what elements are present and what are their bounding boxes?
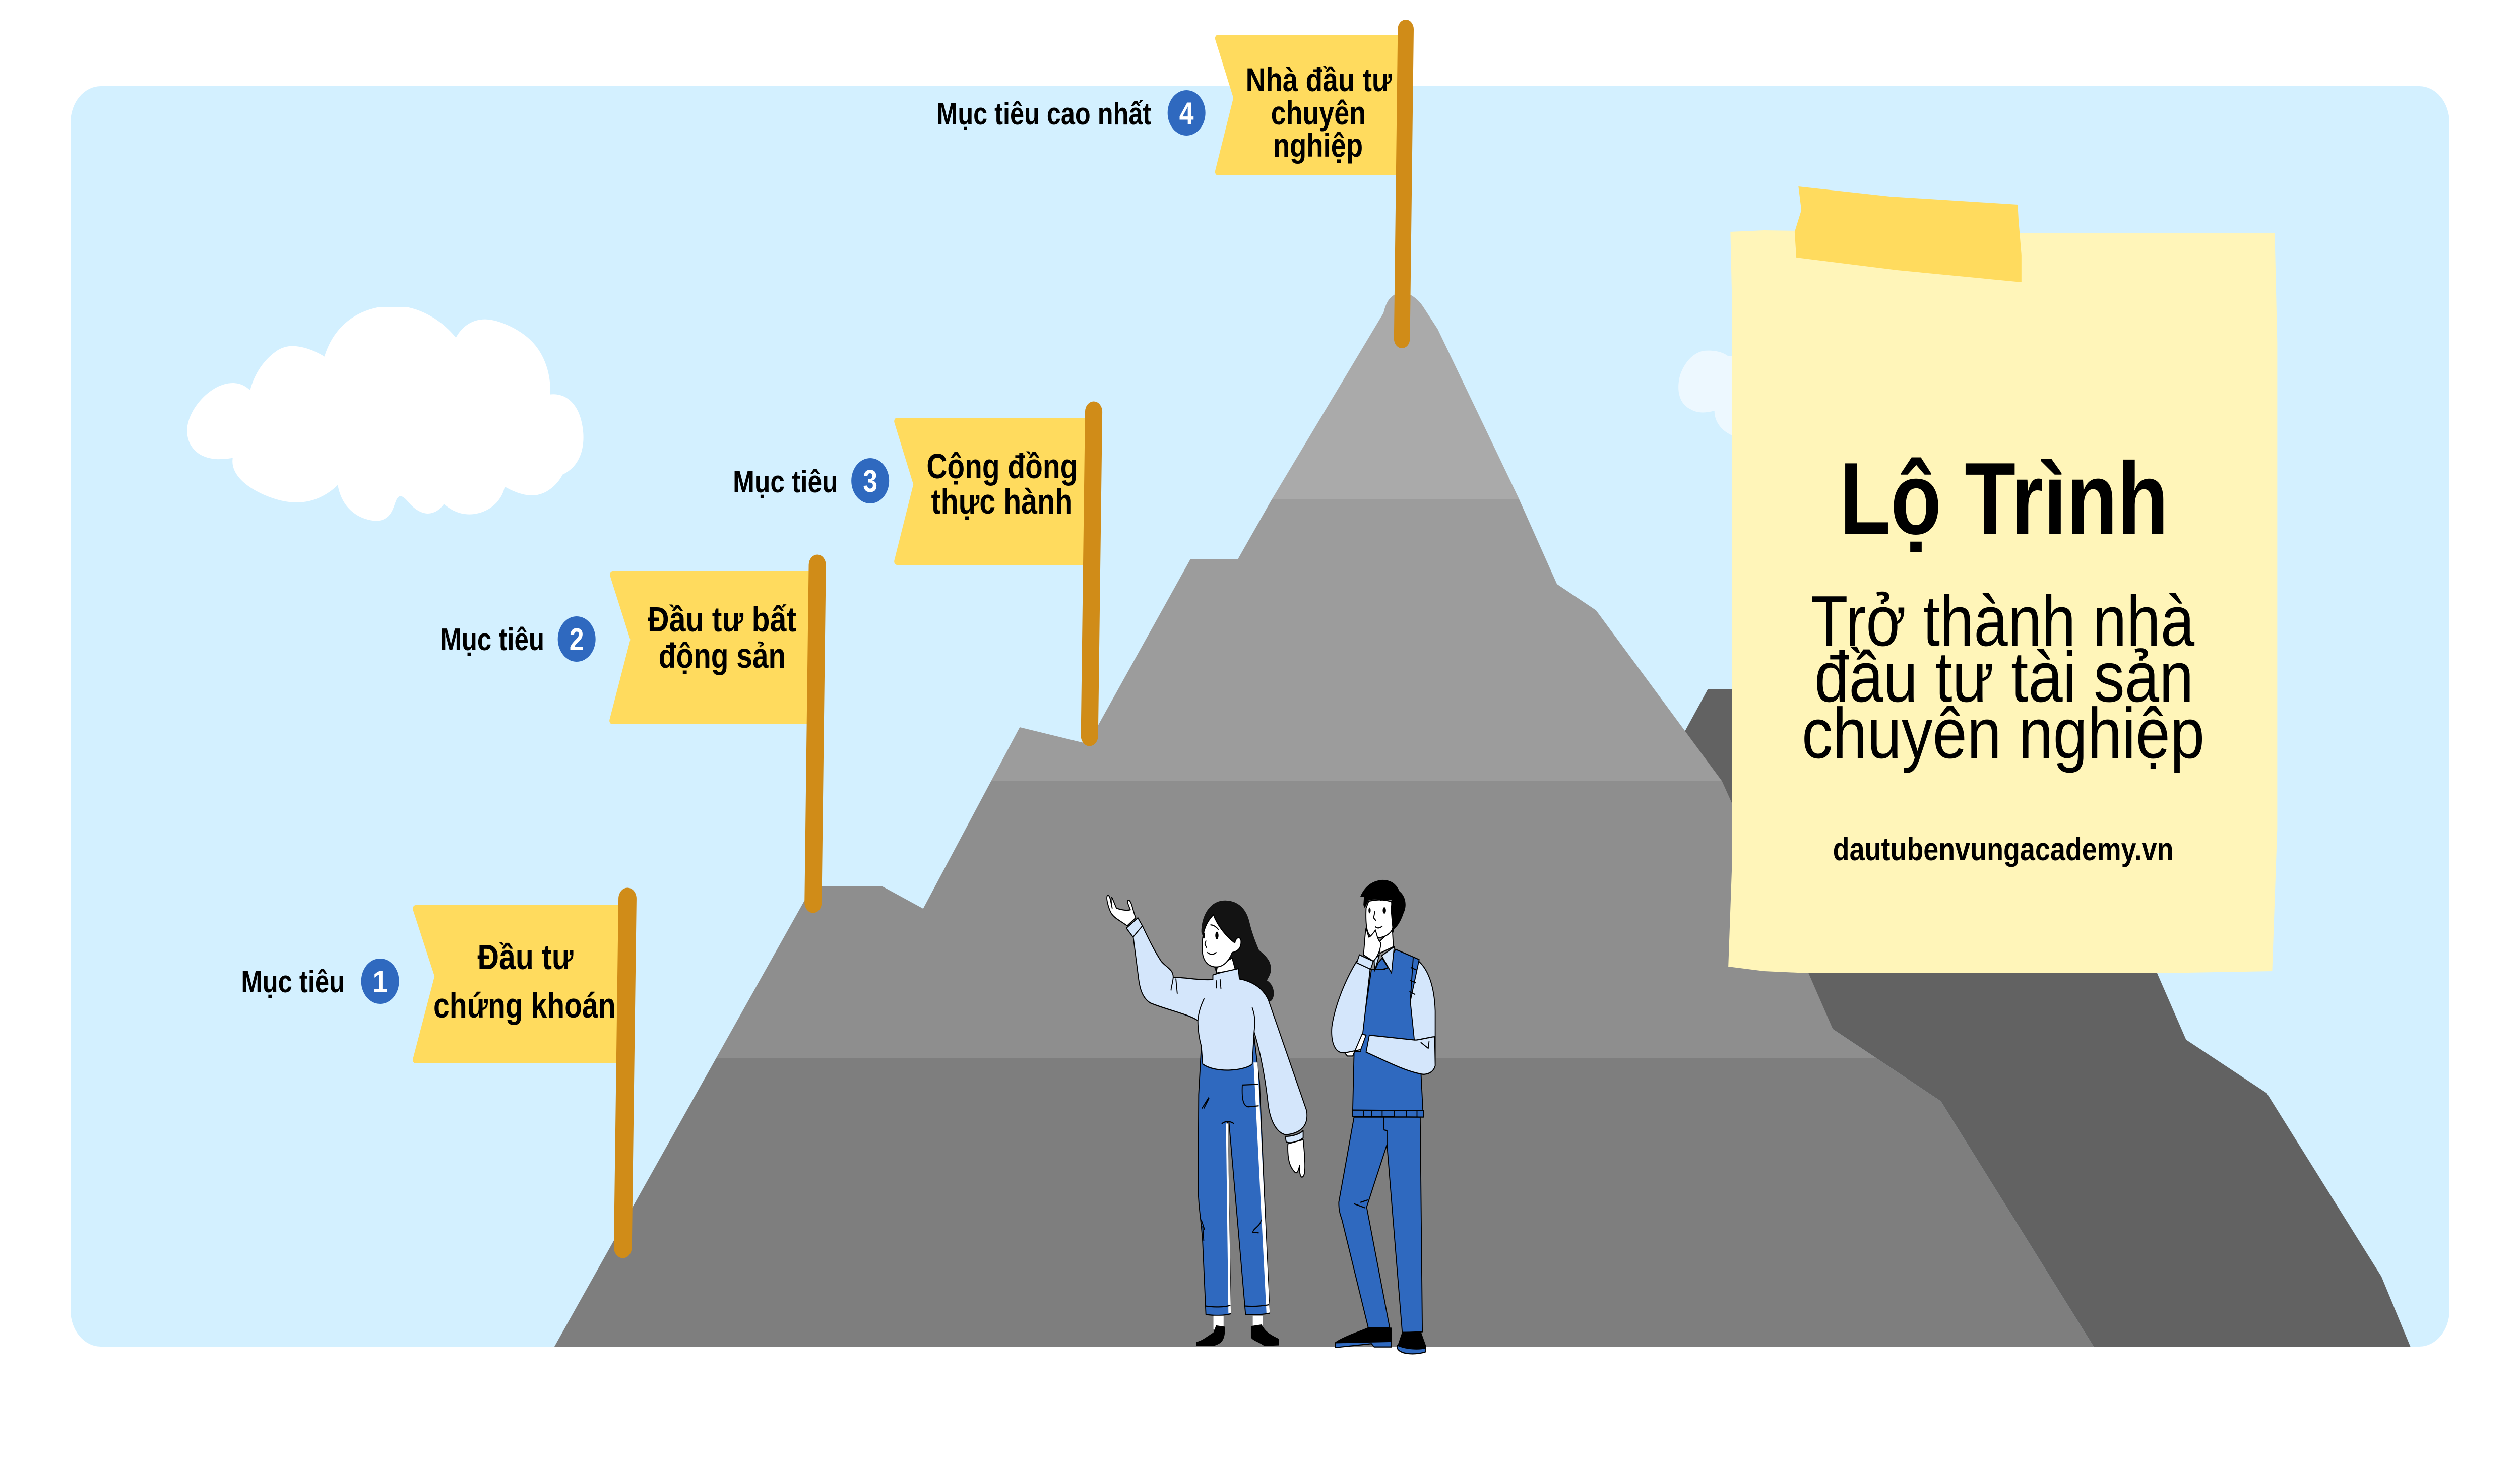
label: Mục tiêu 1: Mục tiêu [241, 965, 345, 999]
mountain: layered front peak [546, 287, 2100, 1347]
label: Mục tiêu 2: 2 [570, 622, 584, 657]
label: Mục tiêu cao nhất 4 [936, 90, 1206, 136]
flag 1: Đầu tư chứng khoán: Đầu tư [478, 937, 574, 977]
label: Mục tiêu cao nhất 4: 4 [1179, 96, 1194, 131]
label: Mục tiêu 1 [241, 959, 399, 1004]
label: Mục tiêu 2 [440, 616, 596, 662]
flag 3: Cộng đồng thực hành [897, 412, 1094, 736]
flag 1: Đầu tư chứng khoán [416, 899, 627, 1247]
flag 2: Đầu tư bất động sản [612, 565, 817, 903]
flag 2: Đầu tư bất động sản: Đầu tư bất [648, 600, 796, 639]
illustration: man thinking [1332, 880, 1435, 1354]
mountain: dark back ridge [1684, 689, 2410, 1347]
illustration: woman pointing up [1107, 895, 1307, 1346]
sticky note [1728, 186, 2277, 973]
flag 4: Nhà đầu tư chuyên nghiệp: nghiệp [1273, 126, 1363, 164]
subtitle: đầu tư tài sản [1814, 637, 2194, 717]
title: Lộ Trình [1840, 441, 2169, 555]
label: Mục tiêu 1: 1 [373, 965, 388, 999]
label: Mục tiêu cao nhất 4: Mục tiêu cao nhất [936, 97, 1151, 132]
flag 3: Cộng đồng thực hành: Cộng đồng [926, 447, 1078, 486]
website: dautubenvungacademy.vn [1833, 832, 2174, 867]
subtitle: Trở thành nhà [1810, 581, 2194, 661]
flag 1: Đầu tư chứng khoán: chứng khoán [433, 986, 616, 1025]
flag 4: Nhà đầu tư chuyên nghiệp [1218, 29, 1406, 339]
label: Mục tiêu 3: Mục tiêu [733, 465, 838, 499]
flag 2: Đầu tư bất động sản: động sản [659, 636, 786, 675]
subtitle: chuyên nghiệp [1802, 693, 2204, 773]
cloud: large white cloud [187, 307, 584, 521]
label: Mục tiêu 2: Mục tiêu [440, 622, 544, 657]
flag 4: Nhà đầu tư chuyên nghiệp: Nhà đầu tư [1246, 61, 1392, 98]
tape [1795, 186, 2022, 282]
cloud: pale cloud behind the note [1678, 351, 1764, 443]
subtitle [1802, 581, 2204, 773]
label: Mục tiêu 3: 3 [863, 464, 877, 499]
label: Mục tiêu 3 [733, 458, 889, 503]
flag 3: Cộng đồng thực hành: thực hành [931, 482, 1073, 521]
flag 4: Nhà đầu tư chuyên nghiệp: chuyên [1271, 94, 1366, 132]
